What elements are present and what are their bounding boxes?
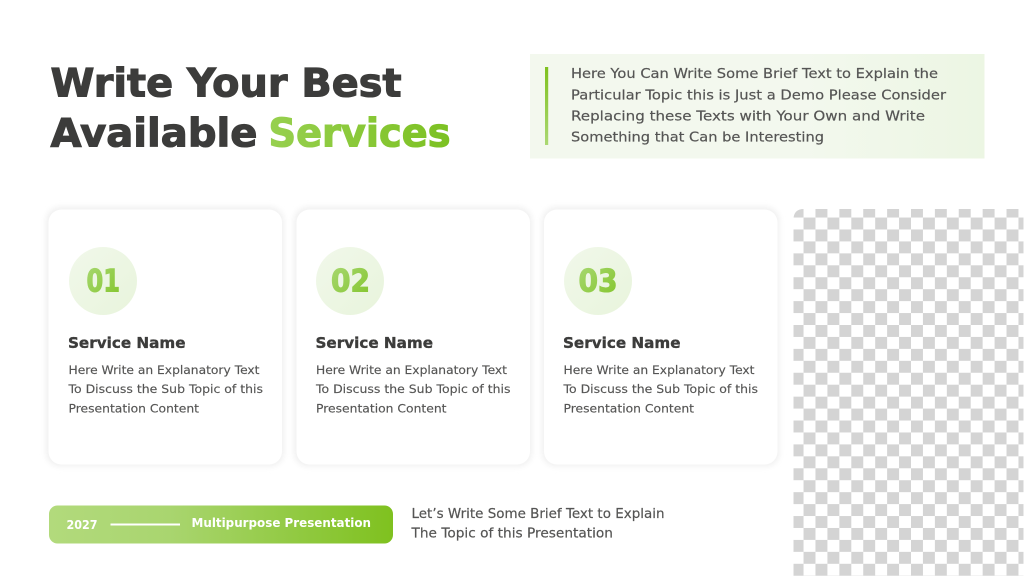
service description: Here Write an Explanatory Text [564,363,755,377]
icon: number badge 03 [564,247,632,315]
service name: Service Name [563,334,680,352]
service description [562,363,758,416]
service description: Presentation Content [564,402,695,416]
intro paragraph: Replacing these Texts with Your Own and Write [571,108,925,124]
service description: To Discuss the Sub Topic of this [67,382,263,396]
icon: number badge 01: 01 [86,264,120,300]
title: Services [268,112,450,157]
accent bar [545,67,548,145]
service description: Presentation Content [68,402,200,416]
title: Write Your Best [50,62,402,107]
banner label: Multipurpose Presentation [192,515,371,530]
service description: To Discuss the Sub Topic of this [562,382,758,396]
service description [67,363,263,416]
icon: number badge 03: 03 [578,264,618,300]
service description: Here Write an Explanatory Text [68,363,260,377]
banner: year and presentation label [49,506,393,544]
footer text: The Topic of this Presentation [410,526,613,542]
panel: service 02 [294,207,532,466]
connector line [110,524,180,526]
service description: Presentation Content [316,402,447,416]
footer text [410,506,664,542]
title [50,62,450,157]
panel: service 03 [542,207,780,466]
intro paragraph [571,66,946,146]
year: 2027 [66,517,98,532]
footer text: Let’s Write Some Brief Text to Explain [412,506,664,522]
panel: service 01 [46,207,284,466]
panel: intro text [530,54,984,158]
service description: Here Write an Explanatory Text [316,363,508,377]
icon: number badge 01 [69,247,137,315]
title: Available [50,112,258,157]
image placeholder: transparency checkerboard [794,209,1024,576]
intro paragraph: Something that Can be Interesting [571,130,824,146]
icon: number badge 02 [316,247,384,315]
intro paragraph: Particular Topic this is Just a Demo Please Consider [571,88,946,104]
service description [315,363,511,416]
service name: Service Name [316,334,433,352]
service name: Service Name [68,334,186,352]
service description: To Discuss the Sub Topic of this [315,382,511,396]
icon: number badge 02: 02 [331,264,370,300]
intro paragraph: Here You Can Write Some Brief Text to Explain the [571,66,938,82]
